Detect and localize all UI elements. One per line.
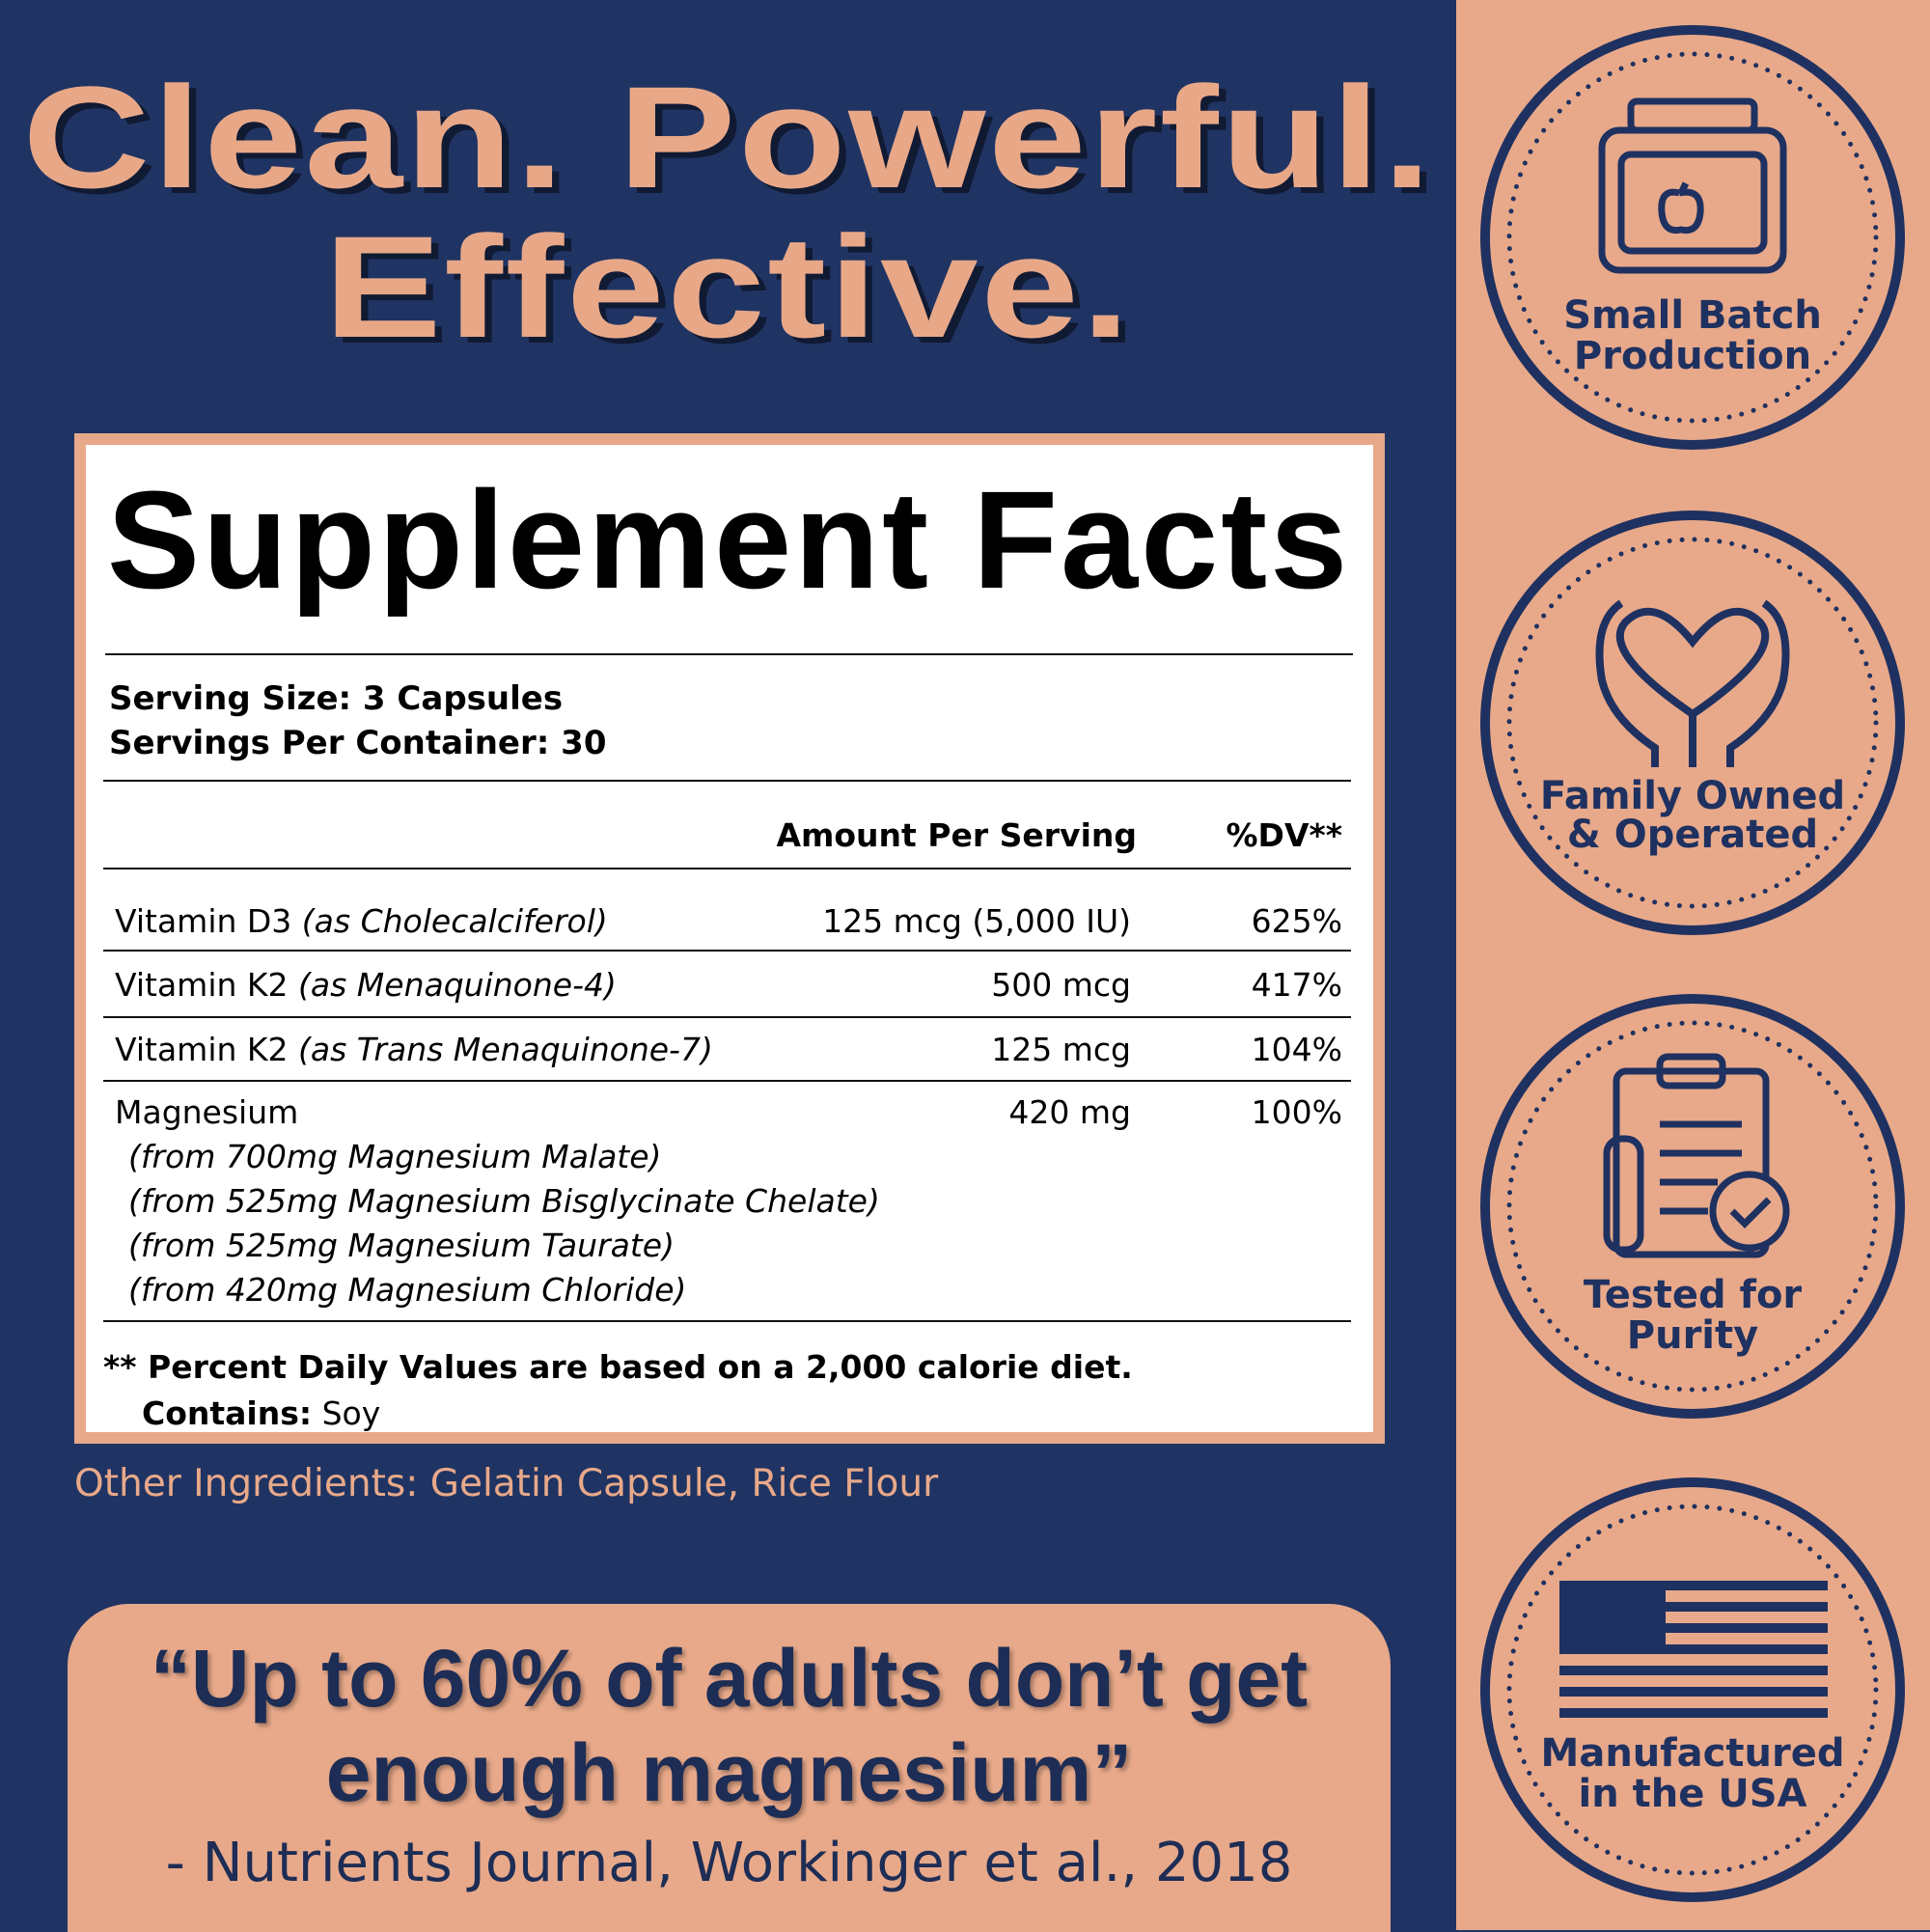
- badge: family owned: Family Owned: [1540, 774, 1845, 818]
- badge: family owned: & Operated: [1567, 813, 1818, 857]
- row: Magnesium: (from 525mg Magnesium Taurate): [128, 1227, 675, 1264]
- row: Vitamin K2 MK7: [115, 1031, 1342, 1068]
- panel: supplement facts: [74, 433, 1385, 1444]
- other ingredients: Other Ingredients: Gelatin Capsule, Rice Flour: [74, 1462, 938, 1505]
- row: Vitamin D3: Vitamin D3 (as Cholecalciferol): [115, 902, 608, 940]
- row: Magnesium: 420 mg: [1008, 1093, 1131, 1131]
- serving info: Servings Per Container: 30: [109, 724, 606, 762]
- badge: manufactured in usa: Manufactured: [1541, 1731, 1844, 1776]
- title: Effective.: [324, 206, 1133, 368]
- footnote: [103, 1348, 1133, 1432]
- row: Magnesium: (from 420mg Magnesium Chloride): [128, 1271, 686, 1309]
- row: Vitamin K2 MK4: Vitamin K2 (as Menaquinone-4): [115, 966, 617, 1004]
- row: Vitamin K2 MK7: 125 mcg: [991, 1031, 1131, 1068]
- column headers: [776, 816, 1342, 854]
- badge: tested for purity: Purity: [1627, 1313, 1758, 1358]
- badge: family owned: [1485, 515, 1900, 930]
- callout: quote: enough magnesium”: [326, 1727, 1132, 1818]
- serving info: [109, 679, 606, 762]
- callout: quote: [68, 1604, 1391, 1932]
- badge: small batch: Small Batch: [1563, 293, 1822, 338]
- badge: small batch: [1485, 30, 1900, 445]
- title: [22, 56, 1434, 368]
- row: Magnesium: Magnesium: [115, 1093, 298, 1131]
- title: Clean. Powerful.: [22, 56, 1434, 218]
- badge: small batch: Production: [1574, 334, 1811, 378]
- badge: manufactured in usa: in the USA: [1578, 1772, 1807, 1816]
- badge: manufactured in usa: [1485, 1482, 1900, 1897]
- footnote: ** Percent Daily Values are based on a 2,000 calorie diet.: [103, 1348, 1133, 1386]
- right column: [1456, 0, 1930, 1930]
- panel: supplement facts: Amount Per Serving: [776, 816, 1137, 854]
- row: Vitamin K2 MK7: Vitamin K2 (as Trans Menaquinone-7): [115, 1031, 713, 1068]
- badge: tested for purity: Tested for: [1584, 1273, 1802, 1317]
- row: Vitamin K2 MK7: 104%: [1252, 1031, 1342, 1068]
- callout: quote: - Nutrients Journal, Workinger et al., 2018: [166, 1832, 1292, 1894]
- callout: quote: “Up to 60% of adults don’t get: [151, 1633, 1308, 1724]
- row: Magnesium: (from 700mg Magnesium Malate): [128, 1138, 661, 1175]
- badge: tested for purity: [1485, 999, 1900, 1414]
- panel: supplement facts: %DV**: [1226, 816, 1342, 854]
- row: Magnesium: [115, 1093, 1342, 1309]
- row: Vitamin K2 MK4: 417%: [1252, 966, 1342, 1004]
- footnote: Contains: Soy: [142, 1394, 380, 1432]
- serving info: Serving Size: 3 Capsules: [109, 679, 563, 718]
- row: Vitamin D3: [115, 902, 1342, 940]
- row: Vitamin K2 MK4: 500 mcg: [991, 966, 1131, 1004]
- row: Vitamin D3: 125 mcg (5,000 IU): [822, 902, 1131, 940]
- row: Vitamin D3: 625%: [1252, 902, 1342, 940]
- row: Magnesium: (from 525mg Magnesium Bisglycinate Chelate): [128, 1182, 880, 1220]
- badges: [1480, 25, 1905, 1902]
- row: Vitamin K2 MK4: [115, 966, 1342, 1004]
- heading: Supplement Facts: Supplement Facts: [107, 462, 1350, 618]
- row: Magnesium: 100%: [1252, 1093, 1342, 1131]
